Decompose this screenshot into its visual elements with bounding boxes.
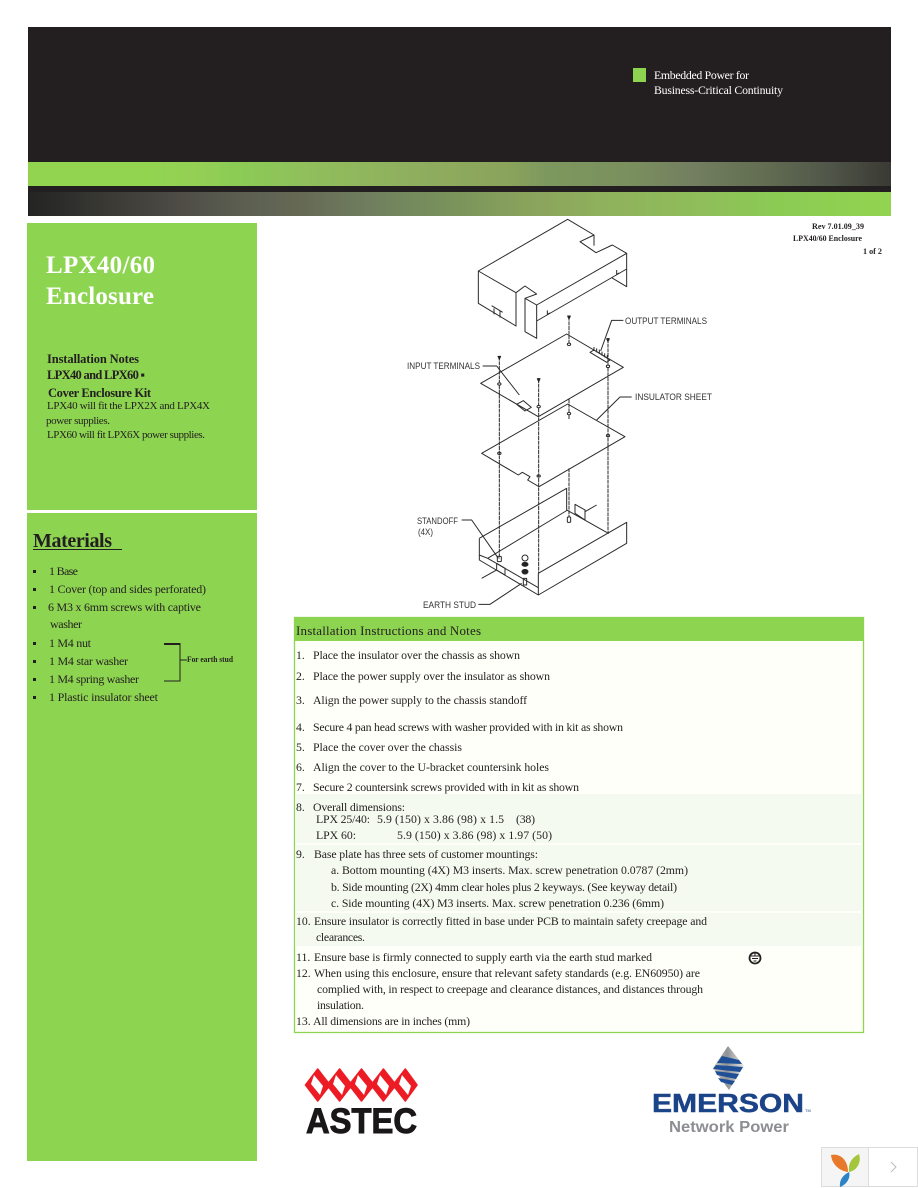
logo: Emerson Network Power: EMERSON [652, 1088, 804, 1118]
callout labels: INSULATOR SHEET [635, 392, 712, 402]
gradient band: green to dark [28, 162, 891, 186]
bracket: for earth stud: For earth stud [187, 654, 233, 664]
step 9: customer mountings [296, 847, 688, 910]
logo: Emerson Network Power [652, 1046, 811, 1136]
steps 11 to 13: All dimensions are in inches (mm) [313, 1014, 470, 1028]
steps 1 to 7: 1. [296, 648, 305, 662]
screw heads [498, 316, 609, 382]
red lattice [306, 1069, 417, 1101]
step 10: insulator: clearances. [316, 930, 365, 944]
callout labels: EARTH STUD [423, 600, 476, 610]
step 8: overall dimensions [296, 800, 552, 842]
logo: Emerson Network Power: TM [805, 1108, 811, 1113]
steps 1 to 7: Place the insulator over the chassis as shown [313, 648, 520, 662]
icon: green square [633, 68, 646, 82]
materials list: 1 Base [49, 564, 78, 578]
heading: product name: LPX40/60 [46, 252, 155, 279]
materials list: 1 Plastic insulator sheet [49, 690, 159, 704]
callout labels: (4X) [418, 527, 433, 537]
steps 1 to 7: 7. [296, 780, 305, 794]
revision block: Rev 7.01.09_39 [812, 221, 864, 231]
step 8: overall dimensions: 5.9 (150) x 3.86 (98) x 1.5 [377, 812, 504, 826]
steps 11 to 13 [296, 950, 703, 1028]
steps 11 to 13: Ensure base is firmly connected to supply earth via the earth stud marked [314, 950, 652, 964]
table: installation instructions [294, 617, 864, 1032]
icon: chevron [891, 1162, 896, 1172]
tagline [654, 68, 783, 97]
tagline: Business-Critical Continuity [654, 83, 783, 97]
subheading: installation notes: Installation Notes [47, 352, 139, 366]
step 8: overall dimensions: Overall dimensions: [313, 800, 405, 814]
steps 1 to 7: Align the power supply to the chassis standoff [313, 693, 527, 707]
table header [294, 617, 864, 641]
callout labels: STANDOFF [417, 516, 458, 526]
steps 11 to 13: complied with, in respect to creepage and clearance distances, and distances through [317, 982, 703, 996]
text: compatibility: LPX60 will fit LPX6X power supplies. [47, 429, 205, 441]
revision block: 1 of 2 [863, 246, 882, 256]
materials list [33, 564, 206, 704]
header banner [28, 27, 891, 216]
table header: Installation Instructions and Notes [296, 623, 481, 638]
callout labels: OUTPUT TERMINALS [625, 316, 707, 326]
step 10: insulator: Ensure insulator is correctly fitted in base under PCB to maintain safety creepage and [314, 914, 707, 928]
callout labels: INPUT TERMINALS [407, 361, 480, 371]
steps 1 to 7: 6. [296, 760, 305, 774]
heading: materials: Materials [33, 530, 112, 552]
tagline: Embedded Power for [654, 68, 749, 82]
step 10: insulator: 10. [296, 914, 311, 928]
materials list: 1 M4 star washer [49, 654, 128, 668]
subheading: installation notes: Cover Enclosure Kit [48, 386, 152, 400]
step 9: customer mountings: a. Bottom mounting (4X) M3 inserts. Max. screw penetration 0.0787 (2mm) [331, 863, 688, 877]
steps 1 to 7: Secure 4 pan head screws with washer provided with in kit as shown [313, 720, 623, 734]
steps 11 to 13: insulation. [317, 998, 364, 1012]
bracket: for earth stud [164, 643, 233, 681]
revision block: LPX40/60 Enclosure [793, 233, 862, 243]
steps 11 to 13: When using this enclosure, ensure that relevant safety standards (e.g. EN60950) are [314, 966, 700, 980]
logo: Astec [306, 1069, 417, 1141]
panel: materials [27, 513, 257, 1161]
steps 1 to 7: 2. [296, 669, 305, 683]
leader lines [462, 320, 632, 604]
step 8: overall dimensions: 5.9 (150) x 3.86 (98) x 1.97 (50) [397, 828, 552, 842]
materials list: 1 M4 spring washer [49, 672, 139, 686]
step 10: insulator [296, 914, 707, 944]
panel: title [27, 223, 257, 510]
step 9: customer mountings: b. Side mounting (2X) 4mm clear holes plus 2 keyways. (See keyway detail) [331, 880, 677, 894]
steps 1 to 7 [296, 648, 623, 794]
materials list: 1 Cover (top and sides perforated) [49, 582, 206, 596]
circuit board [481, 334, 623, 417]
step 9: customer mountings: 9. [296, 847, 305, 861]
subheading: installation notes [47, 352, 152, 400]
step 8: overall dimensions: LPX 25/40: [316, 812, 370, 826]
logo: Astec: ASTEC [306, 1102, 417, 1141]
step 9: customer mountings: Base plate has three sets of customer mountings: [314, 847, 538, 861]
steps 11 to 13: 11. [296, 950, 310, 964]
lattice openings [311, 1075, 411, 1095]
icon: petal logo [831, 1154, 860, 1187]
insulator sheet [482, 404, 625, 487]
materials list: washer [50, 617, 82, 631]
steps 11 to 13: 12. [296, 966, 311, 980]
heading: product name [46, 252, 155, 310]
steps 1 to 7: Place the cover over the chassis [313, 740, 462, 754]
viewer widget [822, 1148, 918, 1187]
step 8: overall dimensions: 8. [296, 800, 305, 814]
gradient band: dark to green [29, 192, 891, 216]
materials list: 6 M3 x 6mm screws with captive [48, 600, 201, 614]
screws and guide lines [499, 317, 608, 573]
steps 1 to 7: 3. [296, 693, 305, 707]
steps 1 to 7: 4. [296, 720, 305, 734]
text: compatibility: power supplies. [46, 415, 110, 427]
steps 1 to 7: Secure 2 countersink screws provided with in kit as shown [313, 780, 579, 794]
icon: earth symbol [750, 952, 760, 964]
step 8: overall dimensions: (38) [516, 812, 535, 826]
steps 1 to 7: 5. [296, 740, 305, 754]
steps 1 to 7: Align the cover to the U-bracket countersink holes [313, 760, 549, 774]
shaded rows [295, 794, 863, 946]
exploded assembly diagram [462, 219, 632, 604]
base chassis [479, 488, 627, 595]
step 8: overall dimensions: LPX 60: [316, 828, 356, 842]
heading: product name: Enclosure [46, 283, 154, 310]
step 9: customer mountings: c. Side mounting (4X) M3 inserts. Max. screw penetration 0.236 (6mm) [331, 896, 664, 910]
callout labels [407, 316, 712, 610]
subheading: installation notes: LPX40 and LPX60 ▪ [47, 368, 145, 382]
text: compatibility: LPX40 will fit the LPX2X and LPX4X [47, 400, 210, 412]
revision block [793, 221, 882, 256]
icon: Emerson diamond [713, 1046, 744, 1090]
cover [478, 219, 627, 338]
text: compatibility [46, 400, 210, 441]
materials list: 1 M4 nut [49, 636, 92, 650]
steps 1 to 7: Place the power supply over the insulator as shown [313, 669, 550, 683]
logo: Emerson Network Power: Network Power [669, 1119, 789, 1136]
steps 11 to 13: 13. [296, 1014, 311, 1028]
